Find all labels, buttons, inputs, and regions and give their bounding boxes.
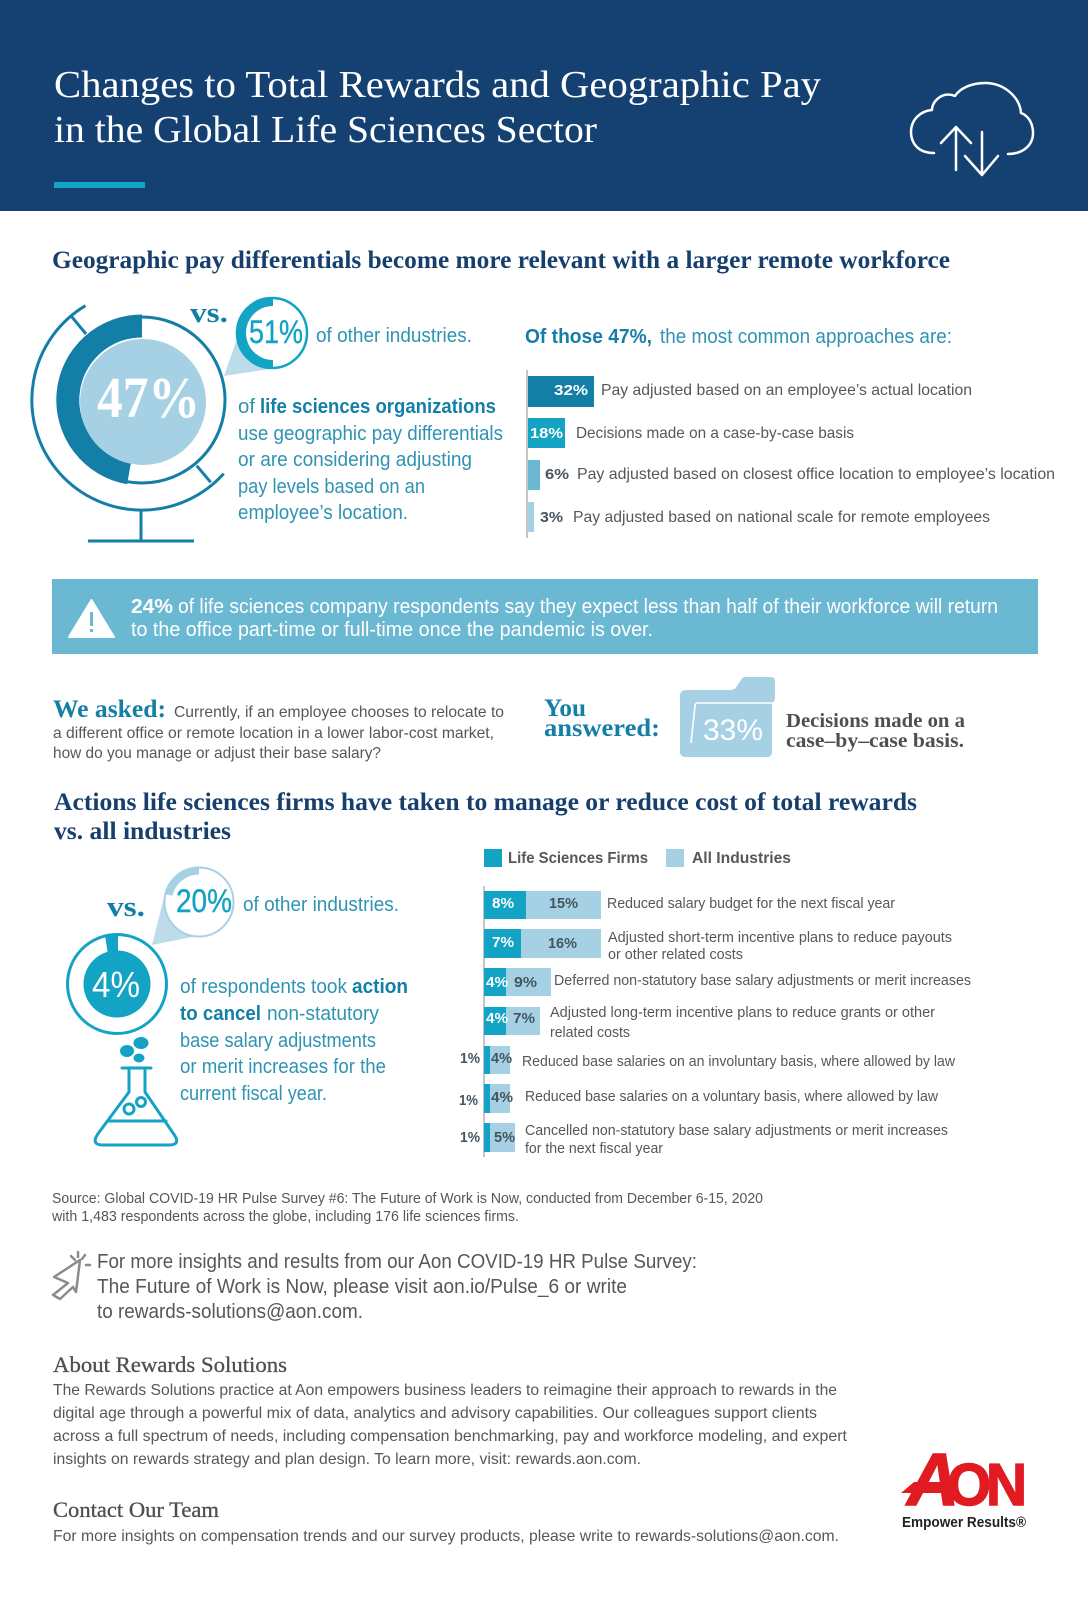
logo: Aon Empower Results: Empower Results® — [902, 1514, 1026, 1531]
panel: you answered: case–by–case basis. — [786, 730, 964, 752]
callout: 51% other industries: of other industries. — [316, 325, 472, 347]
logo: Aon Empower Results — [901, 1438, 1027, 1531]
heading: actions life sciences firms: Actions life sciences firms have taken to manage or reduce cost of total rewards — [54, 789, 917, 816]
text: about rewards solutions: digital age through a powerful mix of data, analytics and advisory capabilities. Our colleagues support clients — [53, 1405, 817, 1422]
row: reduced salary budget: 15% — [549, 895, 578, 912]
heading: actions life sciences firms — [54, 789, 917, 845]
panel: most common approaches — [525, 326, 1055, 538]
legend — [484, 849, 791, 867]
text: more insights: For more insights and results from our Aon COVID-19 HR Pulse Survey: — [97, 1251, 697, 1273]
row: deferred adjustments: Deferred non-statutory base salary adjustments or merit increases — [554, 973, 971, 989]
legend: All Industries — [692, 850, 791, 867]
header banner — [0, 0, 1088, 211]
legend: Life Sciences Firms — [508, 850, 648, 867]
row: deferred adjustments — [484, 968, 971, 996]
icon: folder with 33% — [680, 677, 775, 757]
bar chart: approaches: 18% — [530, 425, 563, 442]
icon: globe donut — [32, 306, 225, 541]
row: cancelled adjustments: Cancelled non-statutory base salary adjustments or merit increases — [525, 1123, 948, 1139]
text: life sciences organizations: of — [238, 396, 255, 418]
panel: we asked — [53, 696, 504, 762]
icon: flask — [95, 1037, 177, 1145]
title: Changes to Total Rewards and Geographic Pay — [54, 64, 821, 106]
text: respondents took action: current fiscal year. — [180, 1083, 327, 1105]
bar chart: approaches: Pay adjusted based on national scale for remote employees — [573, 509, 990, 526]
text: about rewards solutions: About Rewards Solutions — [53, 1352, 287, 1377]
row: reduced salary budget — [484, 891, 895, 919]
text: life sciences organizations: use geographic pay differentials — [238, 423, 503, 445]
heading: geographic pay differentials: Geographic pay differentials become more relevant with a larger remote workforce — [52, 247, 950, 274]
bar chart: approaches: 6% — [545, 466, 569, 483]
callout banner: 24% — [52, 579, 1038, 654]
heading: of those 47%: Of those 47%, — [525, 326, 652, 348]
text: about rewards solutions: insights on rewards strategy and plan design. To learn more, visit: rewards.aon.com. — [53, 1451, 641, 1468]
text: contact our team — [53, 1497, 839, 1545]
panel: 47% globe statistic — [32, 297, 503, 541]
row: voluntary reductions: 1% — [459, 1092, 478, 1109]
panel: we asked: We asked: — [53, 696, 166, 723]
bar chart: approaches — [526, 370, 1055, 538]
text: respondents took action: base salary adjustments — [180, 1030, 376, 1052]
source note: with 1,483 respondents across the globe, including 176 life sciences firms. — [51, 1209, 519, 1225]
logo: Aon Empower Results: A — [905, 1438, 959, 1521]
panel: you answered: answered: — [544, 715, 660, 742]
text: life sciences organizations — [238, 396, 503, 524]
row: voluntary reductions — [459, 1084, 938, 1113]
text: life sciences organizations: employee’s location. — [238, 502, 408, 524]
title: in the Global Life Sciences Sector — [54, 109, 597, 151]
text: respondents took action: or merit increases for the — [180, 1056, 386, 1078]
row: short-term incentive plans: 7% — [492, 934, 514, 951]
title accent bar — [54, 182, 145, 188]
bar chart: approaches: Pay adjusted based on closest office location to employee’s location — [577, 466, 1055, 483]
text: about rewards solutions — [53, 1352, 848, 1468]
title — [54, 64, 821, 151]
text: life sciences organizations: or are considering adjusting — [238, 449, 472, 471]
row: voluntary reductions: Reduced base salaries on a voluntary basis, where allowed by law — [525, 1089, 938, 1105]
row: short-term incentive plans: 16% — [548, 935, 577, 952]
text: respondents took action: non-statutory — [267, 1003, 379, 1025]
bar chart: approaches: Decisions made on a case-by-case basis — [576, 425, 854, 442]
row: cancelled adjustments — [460, 1123, 948, 1157]
text: respondents took action: action — [352, 976, 408, 998]
row: reduced salary budget: 8% — [492, 895, 514, 912]
bar chart: approaches: 3% — [540, 509, 563, 526]
bar chart: approaches: Pay adjusted based on an employee’s actual location — [601, 382, 972, 399]
row: long-term incentive plans: Adjusted long-term incentive plans to reduce grants or other — [550, 1005, 935, 1021]
text: life sciences organizations: pay levels based on an — [238, 476, 425, 498]
row: short-term incentive plans: Adjusted short-term incentive plans to reduce payouts — [608, 930, 952, 946]
row: involuntary reductions: 1% — [460, 1050, 480, 1067]
row: short-term incentive plans: or other related costs — [608, 947, 743, 963]
text: about rewards solutions: The Rewards Solutions practice at Aon empowers business leaders to reimagine their approach to rewards in the — [53, 1382, 837, 1399]
text: respondents took action: of respondents took — [180, 976, 348, 998]
text: life sciences organizations: life sciences organizations — [260, 396, 496, 418]
icon: 4% donut — [68, 934, 166, 1034]
callout: 20% other industries: of other industries. — [243, 894, 399, 916]
icon: folder with 33%: 33% — [703, 714, 763, 747]
text: more insights: to rewards-solutions@aon.com. — [97, 1301, 363, 1323]
row: short-term incentive plans — [484, 929, 952, 963]
icon: globe donut: 47% — [97, 365, 200, 430]
row: cancelled adjustments: for the next fiscal year — [525, 1141, 663, 1157]
heading: of those 47%: the most common approaches are: — [660, 326, 952, 348]
row: cancelled adjustments: 1% — [460, 1129, 480, 1146]
callout: 20% other industries: 20% — [176, 883, 232, 919]
banner text: to the office part-time or full-time once the pandemic is over. — [131, 619, 653, 641]
row: involuntary reductions: Reduced base salaries on an involuntary basis, where allowed by law — [522, 1054, 956, 1070]
panel: we asked: Currently, if an employee chooses to relocate to — [174, 704, 504, 721]
row: long-term incentive plans — [484, 1005, 935, 1041]
text: about rewards solutions: across a full spectrum of needs, including compensation benchmarking, pay and workforce modeling, and expert — [53, 1428, 848, 1445]
panel: you answered: Decisions made on a — [786, 710, 965, 732]
text: respondents took action: to cancel — [180, 1003, 261, 1025]
text: contact our team: For more insights on compensation trends and our survey products, please write to rewards-solutions@aon.com. — [53, 1528, 839, 1545]
row: cancelled adjustments: 5% — [494, 1129, 515, 1146]
text: more insights: The Future of Work is Now, please visit aon.io/Pulse_6 or write — [97, 1276, 627, 1298]
icon: warning triangle — [69, 600, 114, 637]
panel: we asked: how do you manage or adjust their base salary? — [53, 745, 381, 762]
banner text: 24% — [131, 596, 173, 618]
bar chart: actions by life sciences vs all industries — [459, 886, 971, 1157]
vs label: vs. — [107, 891, 145, 923]
text: contact our team: Contact Our Team — [53, 1497, 219, 1522]
row: voluntary reductions: 4% — [491, 1089, 513, 1106]
panel: you answered: You — [544, 695, 586, 722]
callout: 51% other industries: 51% — [249, 314, 303, 350]
banner text: of life sciences company respondents say they expect less than half of their workforce will return — [178, 596, 998, 618]
panel: you answered — [544, 677, 965, 757]
row: reduced salary budget: Reduced salary budget for the next fiscal year — [607, 896, 895, 912]
row: deferred adjustments: 9% — [514, 974, 537, 991]
row: involuntary reductions — [460, 1046, 956, 1074]
row: involuntary reductions: 4% — [491, 1050, 512, 1067]
callout: 20% other industries — [152, 868, 399, 945]
bar chart: approaches: 32% — [554, 382, 588, 399]
text: respondents took action — [180, 976, 408, 1105]
panel: we asked: a different office or remote location in a lower labor-cost market, — [53, 725, 494, 742]
icon: cloud with up and down arrows — [911, 83, 1033, 175]
vs label: vs. — [190, 297, 228, 329]
row: long-term incentive plans: 4% — [486, 1010, 508, 1027]
source note: Source: Global COVID-19 HR Pulse Survey #6: The Future of Work is Now, conducted from December 6-15, 2020 — [52, 1191, 763, 1207]
panel: 4% flask statistic — [68, 868, 408, 1145]
banner text — [131, 596, 998, 641]
row: long-term incentive plans: related costs — [550, 1025, 630, 1041]
callout: 51% other industries — [224, 298, 472, 376]
heading: actions life sciences firms: vs. all industries — [54, 818, 231, 845]
heading: of those 47% — [525, 326, 952, 348]
text: more insights — [97, 1251, 697, 1323]
icon: cursor click — [53, 1252, 90, 1299]
source note — [51, 1191, 763, 1225]
row: deferred adjustments: 4% — [486, 974, 508, 991]
logo: Aon Empower Results: O — [947, 1452, 991, 1518]
logo: Aon Empower Results: N — [986, 1452, 1027, 1518]
row: long-term incentive plans: 7% — [513, 1010, 535, 1027]
icon: 4% donut: 4% — [92, 964, 140, 1005]
